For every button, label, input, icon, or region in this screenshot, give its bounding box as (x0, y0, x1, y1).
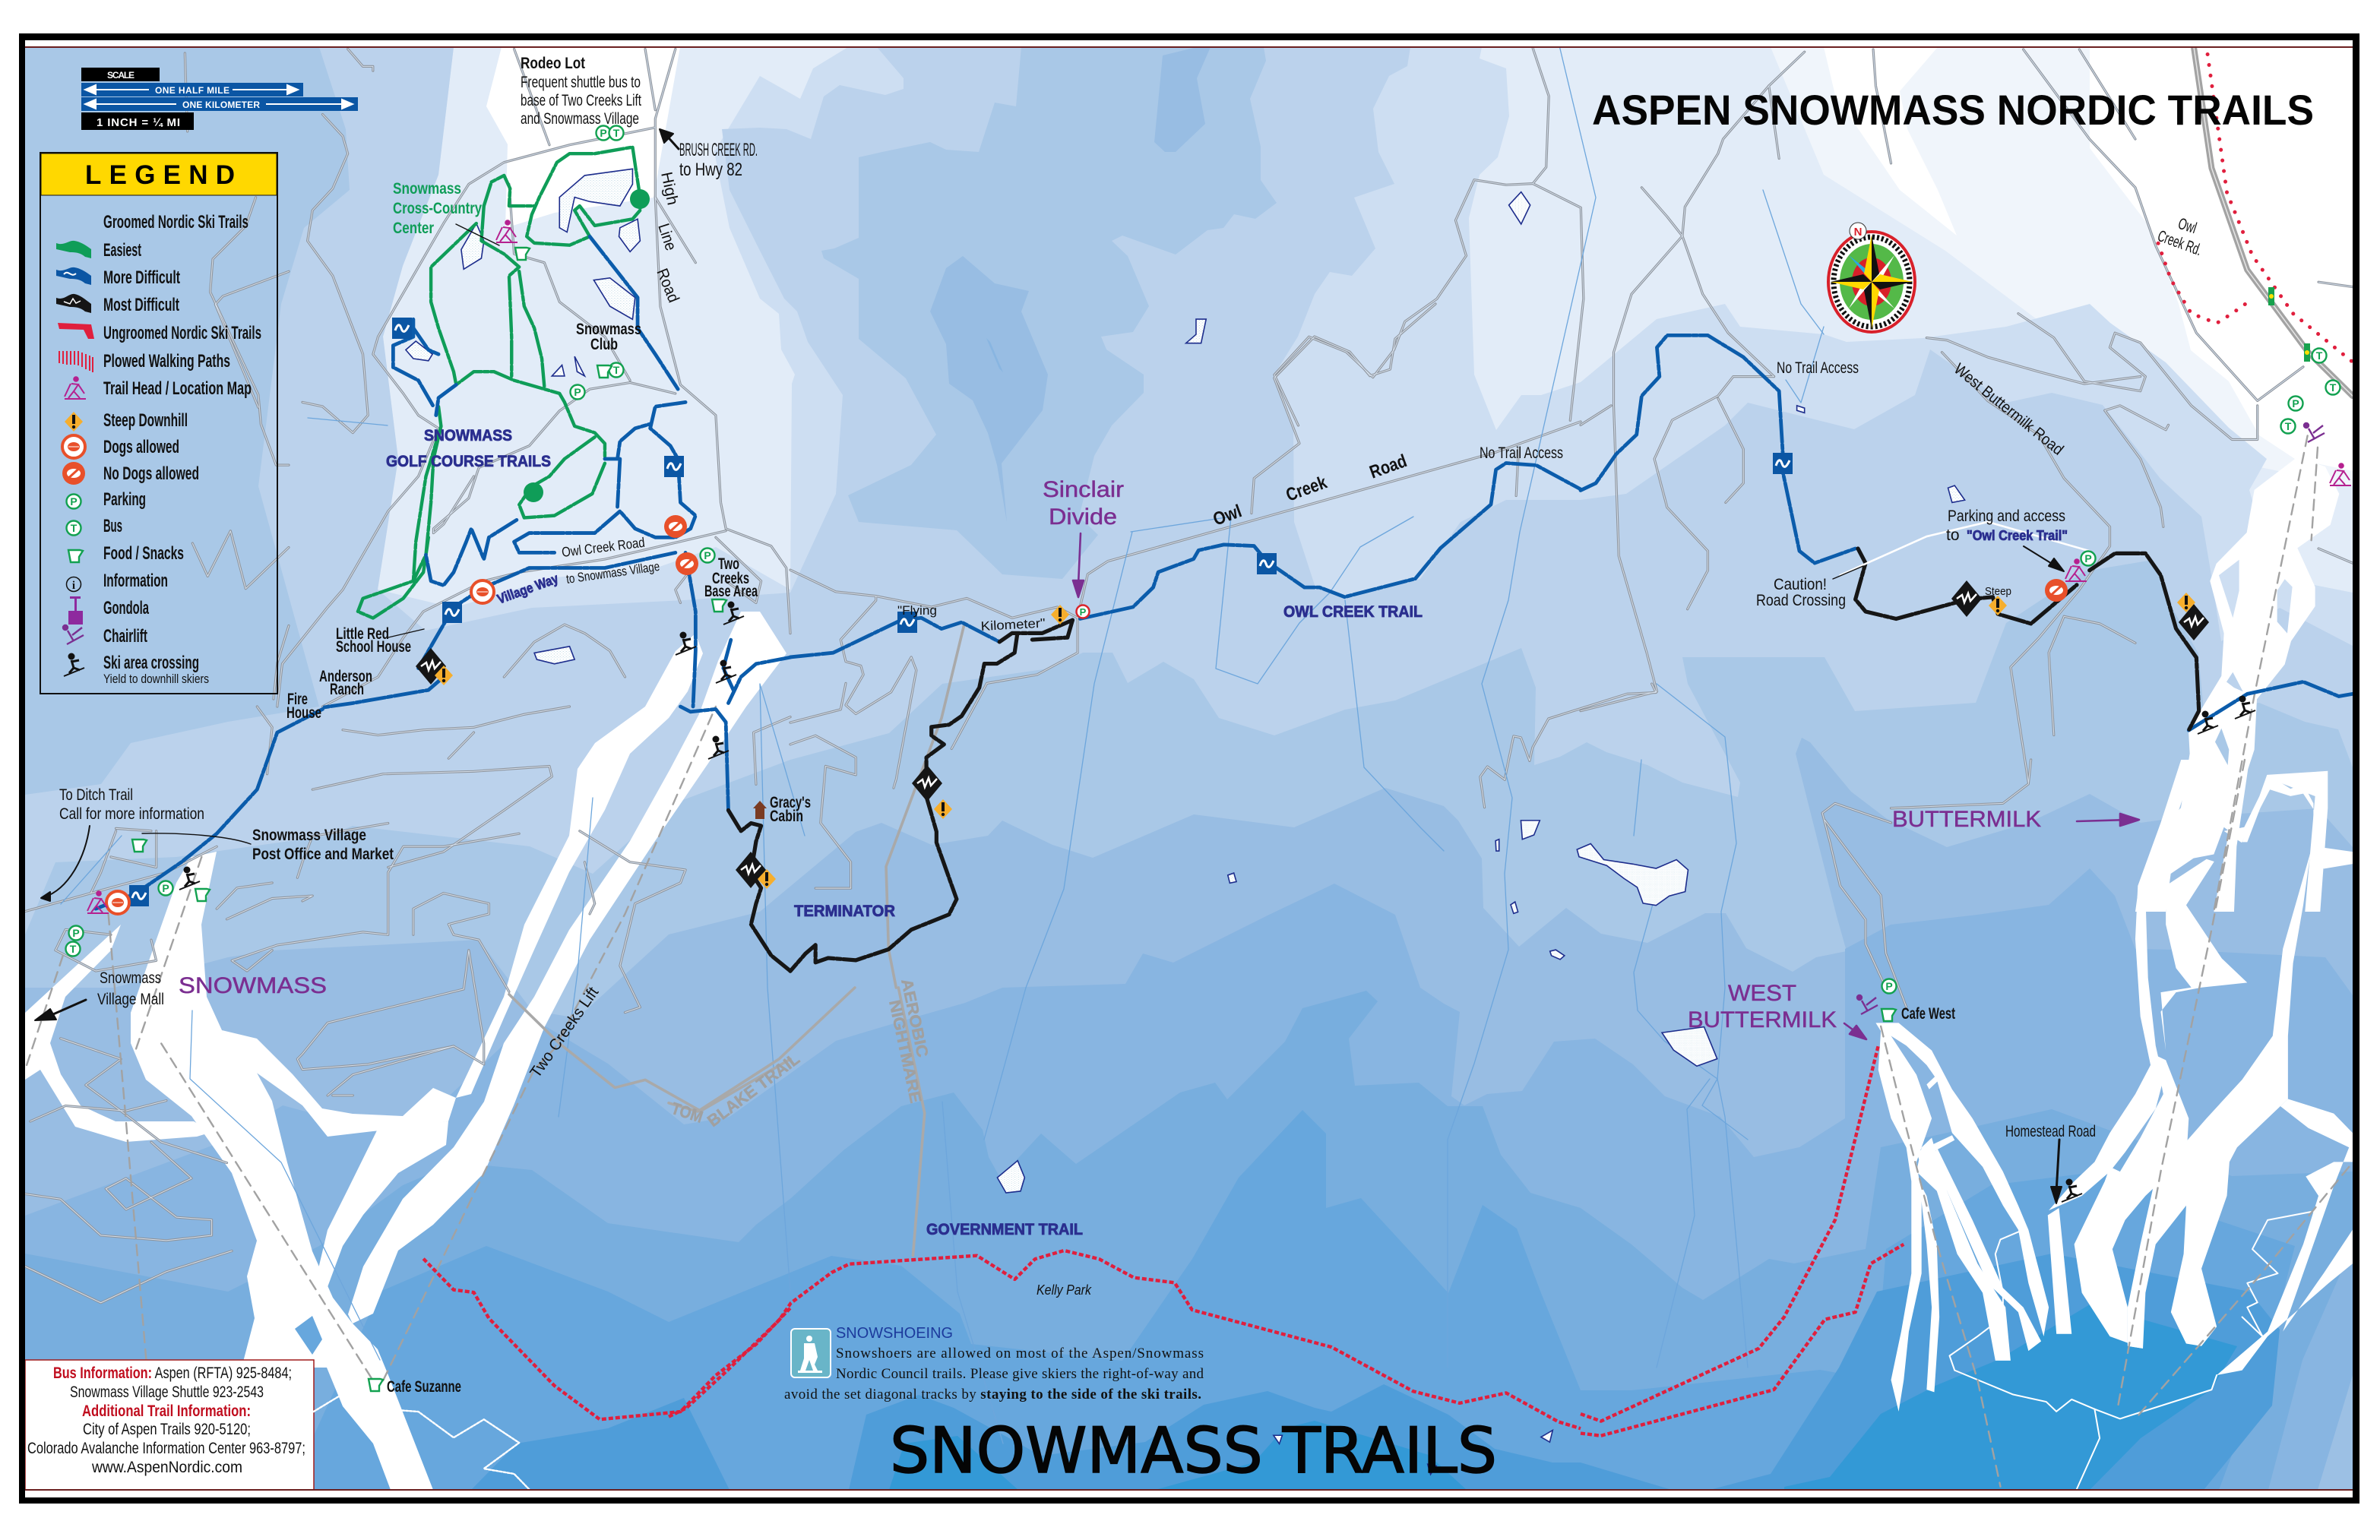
legend rows text: Bus (103, 516, 122, 536)
text labels on map: Base Area (704, 583, 758, 600)
legend header (41, 153, 277, 195)
text labels on map: Club (590, 336, 618, 353)
text labels on map: "Flying (897, 603, 937, 618)
text labels on map: No Trail Access (1777, 359, 1859, 377)
bus and trail information box: Bus Information: Aspen (RFTA) 925-8484; (53, 1364, 292, 1382)
text labels on map: Road Crossing (1756, 592, 1846, 609)
chairlifts: dashed lift lines (25, 435, 2349, 1487)
golf course markers (524, 189, 650, 502)
legend rows text: Ungroomed Nordic Ski Trails (103, 323, 261, 343)
text labels on map: Owl (2176, 215, 2198, 237)
text labels on map: High (657, 170, 682, 207)
text labels on map: to Snowmass Village (565, 559, 660, 587)
text labels on map: Kilometer" (980, 616, 1046, 634)
text labels on map (59, 55, 2204, 1396)
green easiest trails (358, 147, 640, 618)
text labels on map: TERMINATOR (794, 903, 895, 920)
legend rows text: Food / Snacks (103, 543, 184, 564)
text labels on map: Homestead Road (2005, 1123, 2096, 1140)
steep warnings (435, 593, 2195, 889)
ski runs: West Buttermilk and Buttermilk lower (1875, 760, 2353, 1412)
text labels on map: Frequent shuttle bus to (521, 74, 641, 91)
text labels on map: Village Mall (97, 991, 164, 1008)
compass rose: N (1854, 226, 1862, 239)
text labels on map: BLAKE TRAIL (704, 1049, 803, 1130)
text labels on map: Anderson (319, 668, 372, 685)
text labels on map: Owl Creek Road (561, 535, 646, 560)
icon: snowshoer (791, 1329, 831, 1377)
bus and trail information box: Colorado Avalanche Information Center 963-8797; (27, 1440, 305, 1457)
legend rows text: Easiest (103, 240, 141, 261)
trail heads (87, 220, 2351, 913)
text labels on map: NIGHTMARE (885, 998, 924, 1105)
lakes (406, 169, 1965, 1475)
Aerobic Nightmare trail line (886, 625, 964, 1256)
text labels on map: Caution! (1774, 576, 1827, 593)
text labels on map: Parking and access (1948, 508, 2065, 525)
text labels on map: Divide (1049, 504, 1117, 530)
text labels on map: Line (654, 221, 679, 253)
text labels on map: No Trail Access (1480, 444, 1563, 462)
trail signs: blue squares (129, 318, 1793, 906)
text labels on map: WEST (1728, 981, 1796, 1006)
legend rows text: Plowed Walking Paths (103, 351, 230, 372)
bus and trail information box (25, 1360, 314, 1491)
highway 82 (2194, 47, 2353, 396)
trail signs: black diamonds (416, 580, 2209, 888)
text labels on map: Creeks (712, 570, 749, 587)
ski runs: Buttermilk upper (2135, 457, 2339, 912)
arrows and leaders (35, 129, 2064, 1203)
text labels on map: Kelly Park (1037, 1282, 1092, 1298)
text labels on map: Steep (1985, 585, 2011, 598)
Sinclair Divide no parking marker (1076, 605, 1090, 618)
text labels on map: Snowmass Village (252, 827, 366, 844)
text labels on map: Little Red (336, 625, 389, 643)
text labels on map: Cafe West (1901, 1005, 1955, 1023)
text labels on map: West Buttermilk Road (1951, 360, 2067, 459)
legend rows text: Trail Head / Location Map (103, 378, 252, 399)
text labels on map: AEROBIC (897, 977, 931, 1059)
text labels on map: Post Office and Market (252, 846, 394, 863)
text labels on map: Owl (1211, 501, 1245, 530)
legend rows text: Most Difficult (103, 295, 179, 315)
text labels on map: BUTTERMILK (1892, 807, 2041, 832)
scale bars: ONE KILOMETER (182, 100, 260, 110)
text labels on map: OWL CREEK TRAIL (1283, 603, 1423, 621)
purple location arrows (1073, 533, 2139, 1039)
snowshoeing note: avoid the set diagonal tracks by staying to the side of the ski trails. (784, 1387, 1201, 1402)
title: Snowmass Trails: SNOWMASS TRAILS (890, 1414, 1497, 1488)
snowshoeing note: Snowshoers are allowed on most of the Aspen/Snowmass (836, 1346, 1204, 1361)
legend icons: i (72, 580, 75, 592)
text labels on map: Ranch (330, 681, 364, 698)
parking and bus markers (65, 126, 2340, 994)
buttermilk white cat roads (1950, 1210, 2318, 1489)
scale bars: SCALE (107, 70, 135, 81)
text labels on map: SNOWMASS (179, 973, 327, 998)
food cups (132, 248, 1896, 1391)
legend rows text (103, 212, 261, 686)
text labels on map: Snowmass (393, 180, 461, 198)
ski runs: Snowmass (25, 612, 786, 1490)
snowshoeing note: Nordic Council trails. Please give skiers the right-of-way and (836, 1366, 1204, 1382)
bus and trail information box: www.AspenNordic.com (91, 1459, 242, 1476)
scale bars: ONE HALF MILE (155, 85, 229, 96)
text labels on map: Rodeo Lot (521, 55, 585, 72)
legend rows text: Information (103, 571, 168, 591)
text labels on map: Creek (1283, 472, 1330, 506)
text labels on map: TOM (669, 1099, 705, 1127)
legend rows text: Dogs allowed (103, 437, 179, 457)
text labels on map: "Owl Creek Trail" (1967, 528, 2068, 543)
text labels on map: Center (393, 220, 434, 237)
bus and trail information box: Snowmass Village Shuttle 923-2543 (70, 1383, 264, 1401)
text labels on map: Sinclair (1043, 477, 1124, 502)
legend rows text: Chairlift (103, 626, 147, 647)
text labels on map: Cabin (770, 808, 803, 825)
Sinclair Divide no parking marker: P (1080, 606, 1087, 618)
text labels on map: Snowmass (576, 321, 641, 338)
text labels on map: Gracy's (770, 794, 811, 811)
snowshoeing note (784, 1325, 1204, 1402)
text labels on map: BRUSH CREEK RD. (679, 140, 758, 160)
text labels on map: GOVERNMENT TRAIL (926, 1221, 1083, 1238)
Owl Creek trail (790, 335, 2353, 730)
scale bars (81, 68, 358, 130)
red ungroomed trail (Government Trail) (423, 1045, 1904, 1436)
text labels on map: to (1946, 527, 1960, 544)
blue more difficult trails (323, 236, 790, 707)
legend rows text: Parking (103, 489, 146, 510)
chairlift markers (1857, 423, 2325, 1014)
streams (61, 46, 1824, 1444)
text labels on map: and Snowmass Village (521, 110, 639, 128)
dog markers (106, 515, 2068, 914)
traffic lights (2268, 287, 2310, 362)
compass rose (1828, 223, 1915, 332)
text labels on map: Cross-Country (393, 200, 482, 217)
text labels on map: House (286, 704, 321, 722)
text labels on map: Village Way (495, 571, 560, 607)
legend panel (40, 153, 277, 694)
text labels on map: base of Two Creeks Lift (521, 92, 641, 109)
text labels on map: SNOWMASS (424, 427, 512, 444)
snowshoeing note: SNOWSHOEING (836, 1325, 953, 1342)
legend rows text: More Difficult (103, 267, 180, 288)
white access road to Owl Creek Trail (1840, 522, 2090, 575)
text labels on map: to Hwy 82 (679, 160, 742, 180)
text labels on map: Creek Rd. (2155, 227, 2204, 259)
white dotted trail near Cafe Suzanne (314, 1391, 529, 1489)
bus and trail information box: City of Aspen Trails 920-5120; (83, 1421, 251, 1438)
scale bars: 1 INCH = ¼ MI (97, 116, 180, 129)
text labels on map: BUTTERMILK (1688, 1007, 1837, 1032)
red dotted walking path (2158, 54, 2353, 362)
text labels on map: Road (653, 266, 682, 305)
legend header: LEGEND (85, 160, 235, 190)
text labels on map: Road (1367, 451, 1410, 483)
legend rows text: Groomed Nordic Ski Trails (103, 212, 248, 232)
text labels on map: Cafe Suzanne (387, 1378, 461, 1396)
legend rows text: Ski area crossing (103, 653, 199, 673)
title: Aspen Snowmass Nordic Trails: ASPEN SNOWMASS NORDIC TRAILS (1592, 86, 2314, 134)
legend rows text: Yield to downhill skiers (103, 672, 209, 686)
bus and trail information box: Additional Trail Information: (82, 1402, 251, 1420)
black most difficult trails (728, 549, 2199, 971)
text labels on map: To Ditch Trail (59, 786, 133, 804)
text labels on map: School House (336, 638, 411, 656)
text labels on map: Two Creeks Lift (527, 984, 602, 1081)
text labels on map: Fire (287, 691, 308, 708)
text labels on map: GOLF COURSE TRAILS (386, 453, 551, 470)
legend icons (56, 241, 94, 676)
legend rows text: Steep Downhill (103, 410, 188, 431)
legend rows text: Gondola (103, 598, 149, 618)
legend rows text: No Dogs allowed (103, 463, 199, 484)
text labels on map: Two (718, 555, 739, 573)
Tom Blake trail line (509, 988, 855, 1112)
text labels on map: Call for more information (59, 805, 204, 823)
road network (25, 48, 2353, 1303)
text labels on map: Snowmass (100, 969, 161, 987)
Gracy's Cabin icon (753, 801, 767, 819)
ski crossings (179, 602, 2255, 1202)
